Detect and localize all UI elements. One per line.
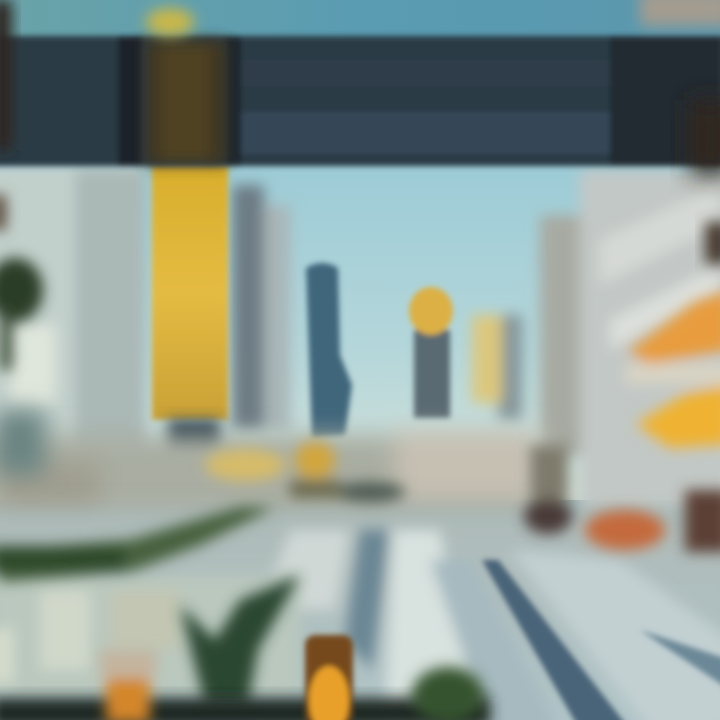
distant pale gold tower — [472, 315, 522, 420]
foreground lamp center — [305, 635, 353, 720]
right buildings — [540, 170, 720, 510]
left dark frame — [0, 0, 12, 230]
right orange glowing balconies — [625, 290, 720, 448]
street lights glow — [205, 442, 405, 502]
sky strip above bridge — [0, 0, 720, 40]
hedge row — [0, 507, 275, 582]
distant tower with golden top — [409, 287, 453, 418]
top right building corner — [640, 0, 720, 26]
grey towers beside yellow tower — [232, 185, 290, 430]
left plaza — [0, 575, 300, 695]
lower left structure — [0, 410, 45, 475]
elevated bridge — [0, 36, 720, 166]
dark road lines — [482, 560, 720, 720]
left tree — [0, 258, 43, 370]
left pale building block — [0, 165, 145, 465]
road lane stripes — [260, 530, 720, 720]
foreground bottom dark wall — [0, 698, 490, 720]
foreground palm plant — [180, 575, 300, 705]
foreground pale post — [0, 628, 14, 683]
dark lower edge of yellow tower — [168, 420, 220, 458]
right wall detail — [705, 222, 720, 264]
distant blue tower — [306, 263, 352, 438]
tall yellow tower — [152, 165, 228, 420]
dark yellow tower section on bridge — [145, 40, 227, 165]
sky background — [0, 160, 720, 500]
right dark frame — [690, 100, 720, 175]
road-side vehicles and lights — [524, 445, 720, 552]
mid street haze — [0, 430, 540, 520]
yellow tower cap — [146, 8, 194, 36]
ground and road — [0, 512, 720, 720]
foreground shrub right — [412, 667, 484, 720]
foreground lamp left — [100, 650, 156, 720]
